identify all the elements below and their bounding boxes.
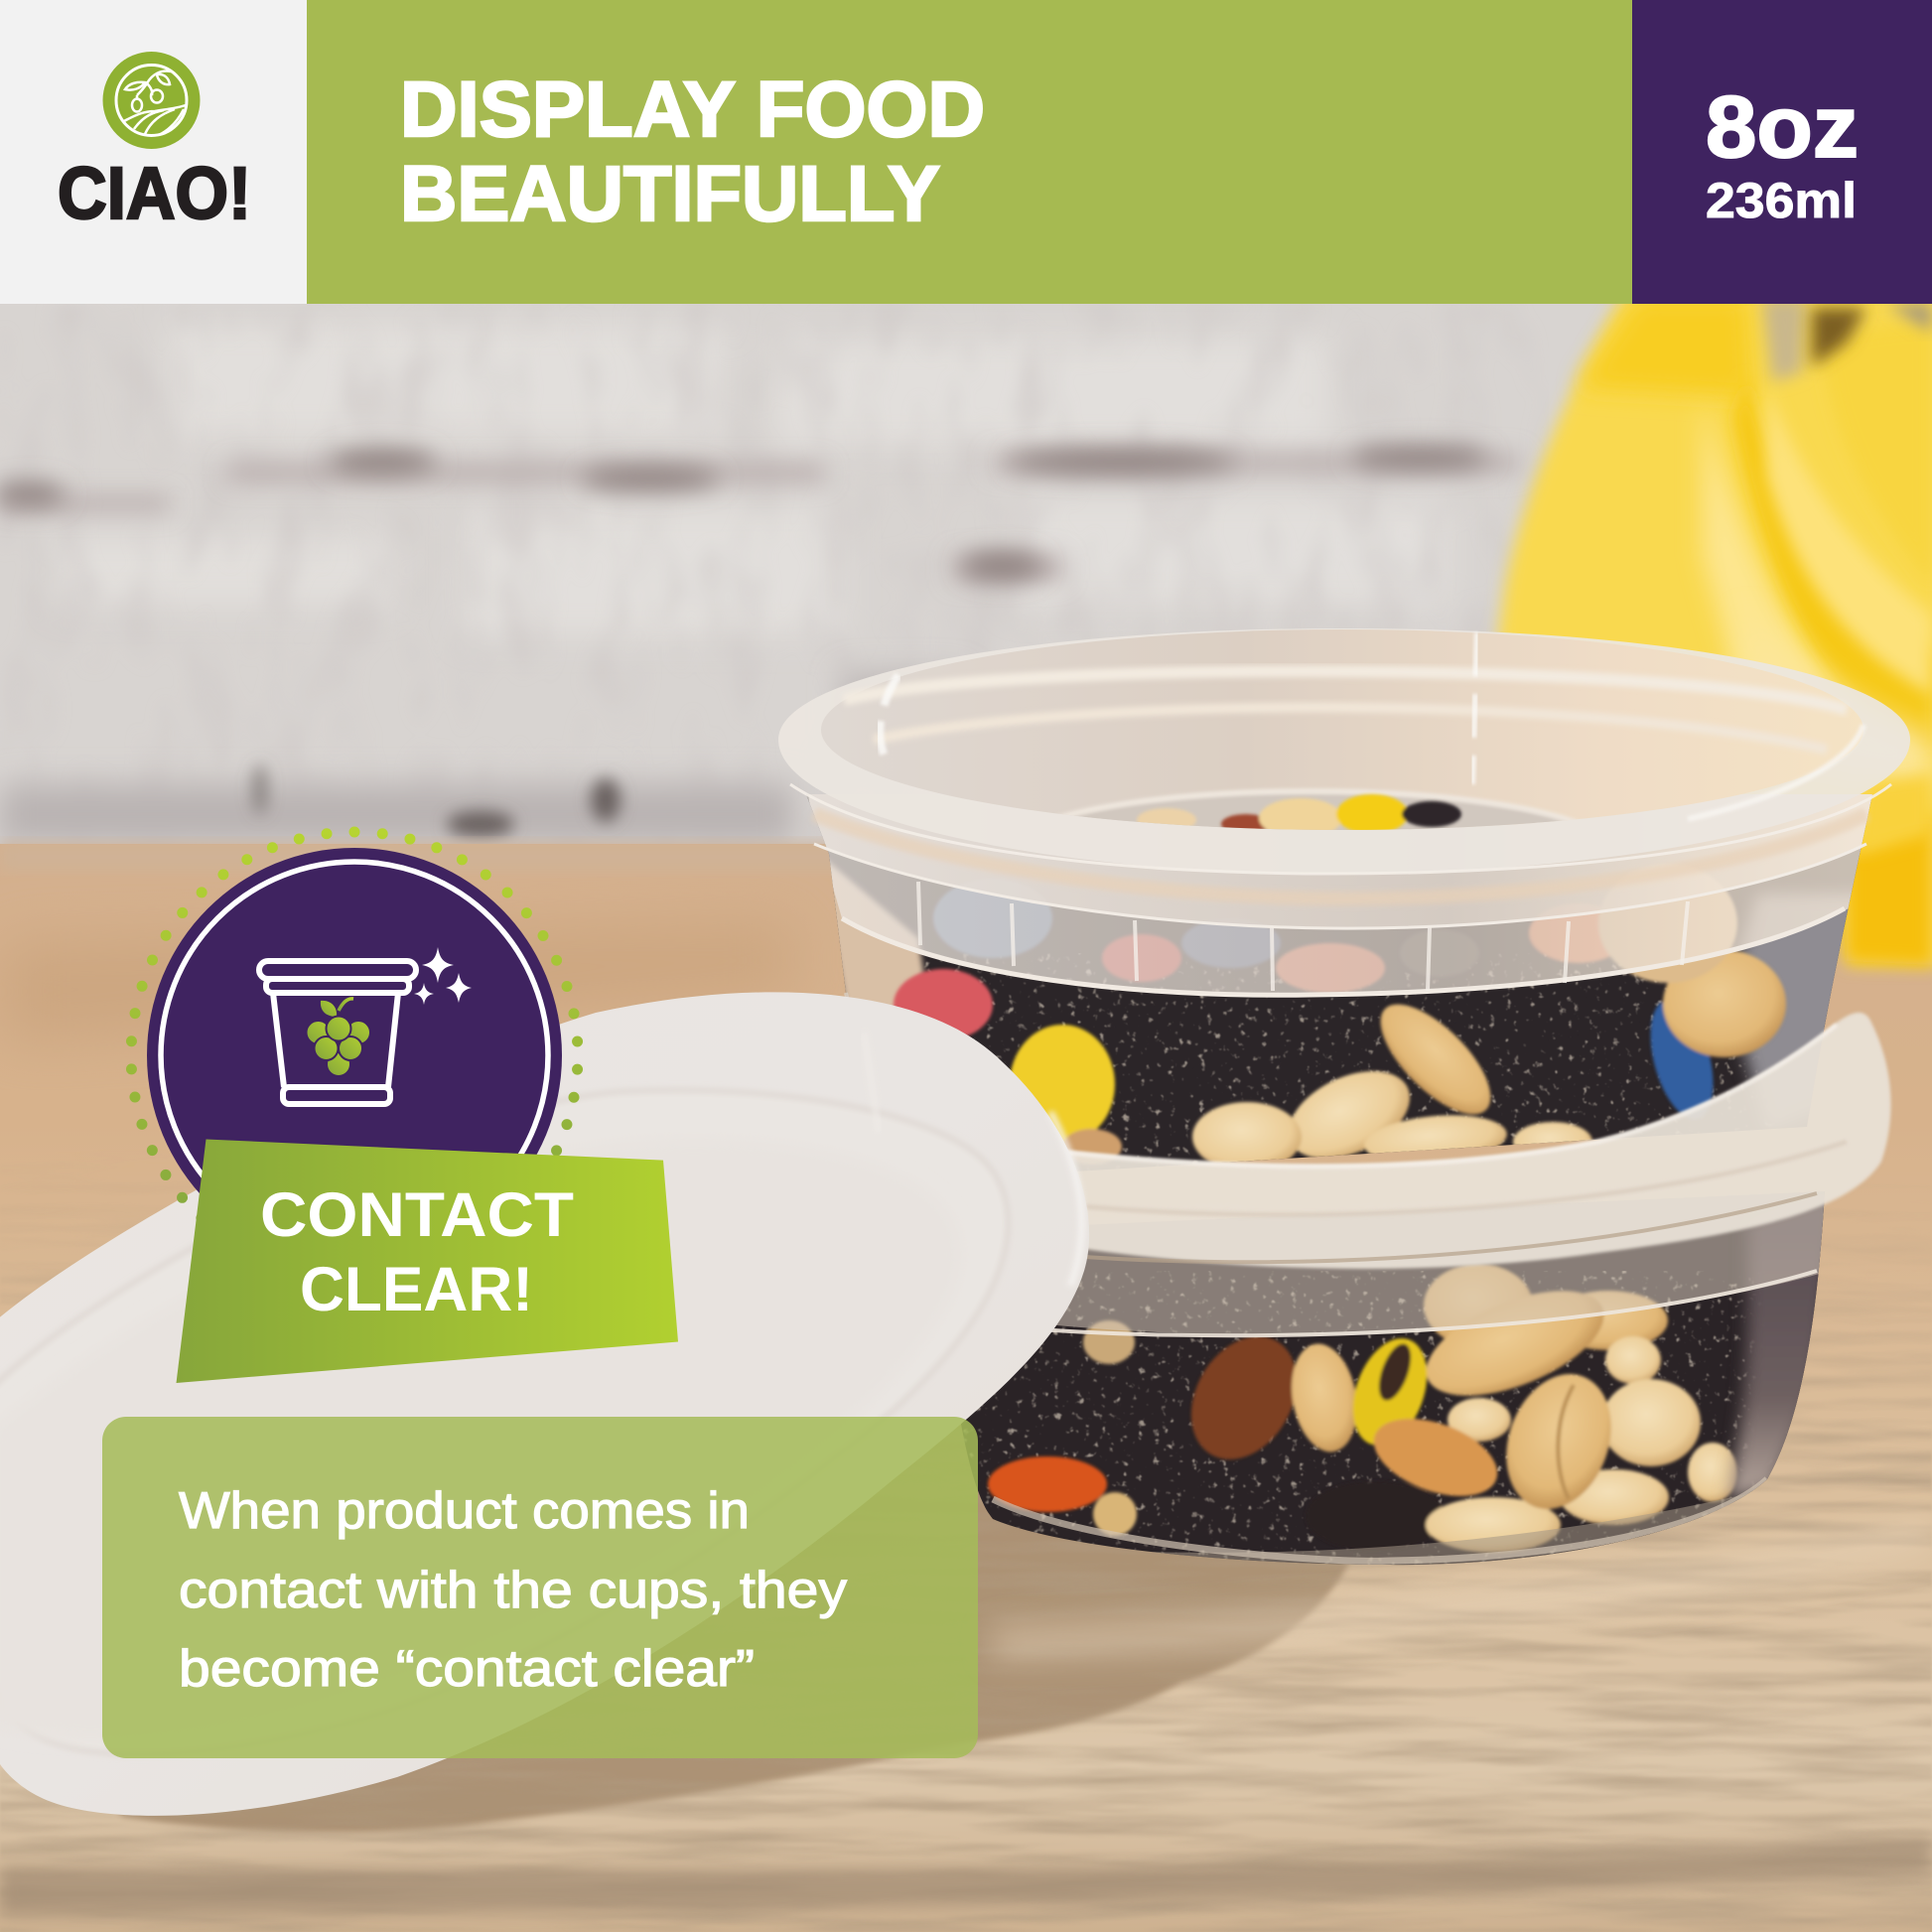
container: upper tub (778, 628, 1910, 1269)
upper tub frosted panels (806, 794, 1872, 995)
title: DISPLAY FOOD (400, 65, 985, 153)
callout text: contact with the cups, they (179, 1562, 847, 1619)
icon: deli cup (259, 961, 416, 1104)
callout text: When product comes in (179, 1482, 750, 1540)
logo panel (0, 0, 307, 304)
logo wordmark: CIAO! (58, 152, 251, 234)
upper tub food and body (794, 774, 1886, 1181)
size label: 8oz (1706, 77, 1859, 176)
title: BEAUTIFULLY (400, 149, 940, 237)
wood table (0, 844, 1932, 1932)
icon: grapes (306, 999, 370, 1076)
brick wall (0, 304, 1624, 844)
banner text (260, 1180, 574, 1324)
title (400, 65, 985, 237)
icon: sparkles (414, 947, 472, 1005)
callout text (179, 1482, 847, 1698)
banner (177, 1140, 678, 1383)
banner text: CONTACT (260, 1180, 574, 1250)
shadow of lid on table (118, 1491, 1349, 1835)
dotted ring (131, 832, 578, 1279)
callout text: become “contact clear” (179, 1640, 755, 1698)
size label: 236ml (1706, 173, 1857, 228)
lower tub food and body (961, 1201, 1825, 1565)
upper tub step line (842, 908, 1845, 995)
header bar (0, 0, 1932, 304)
badge inner ring (161, 862, 548, 1249)
banner text: CLEAR! (300, 1255, 533, 1324)
upper tub rim (778, 628, 1910, 906)
lower tub rim band (1033, 1013, 1891, 1269)
container: lower tub (961, 1201, 1825, 1565)
logo icon (103, 52, 201, 149)
callout panel (102, 1417, 978, 1758)
upper tub shoulder bands (808, 794, 1872, 927)
bananas (1498, 288, 1932, 965)
size panel (1632, 0, 1932, 304)
logo (58, 52, 251, 234)
badge circle (147, 848, 562, 1263)
title panel (307, 0, 1632, 304)
lid (0, 992, 1089, 1816)
badge: contact clear (131, 832, 678, 1383)
size label (1706, 77, 1859, 228)
